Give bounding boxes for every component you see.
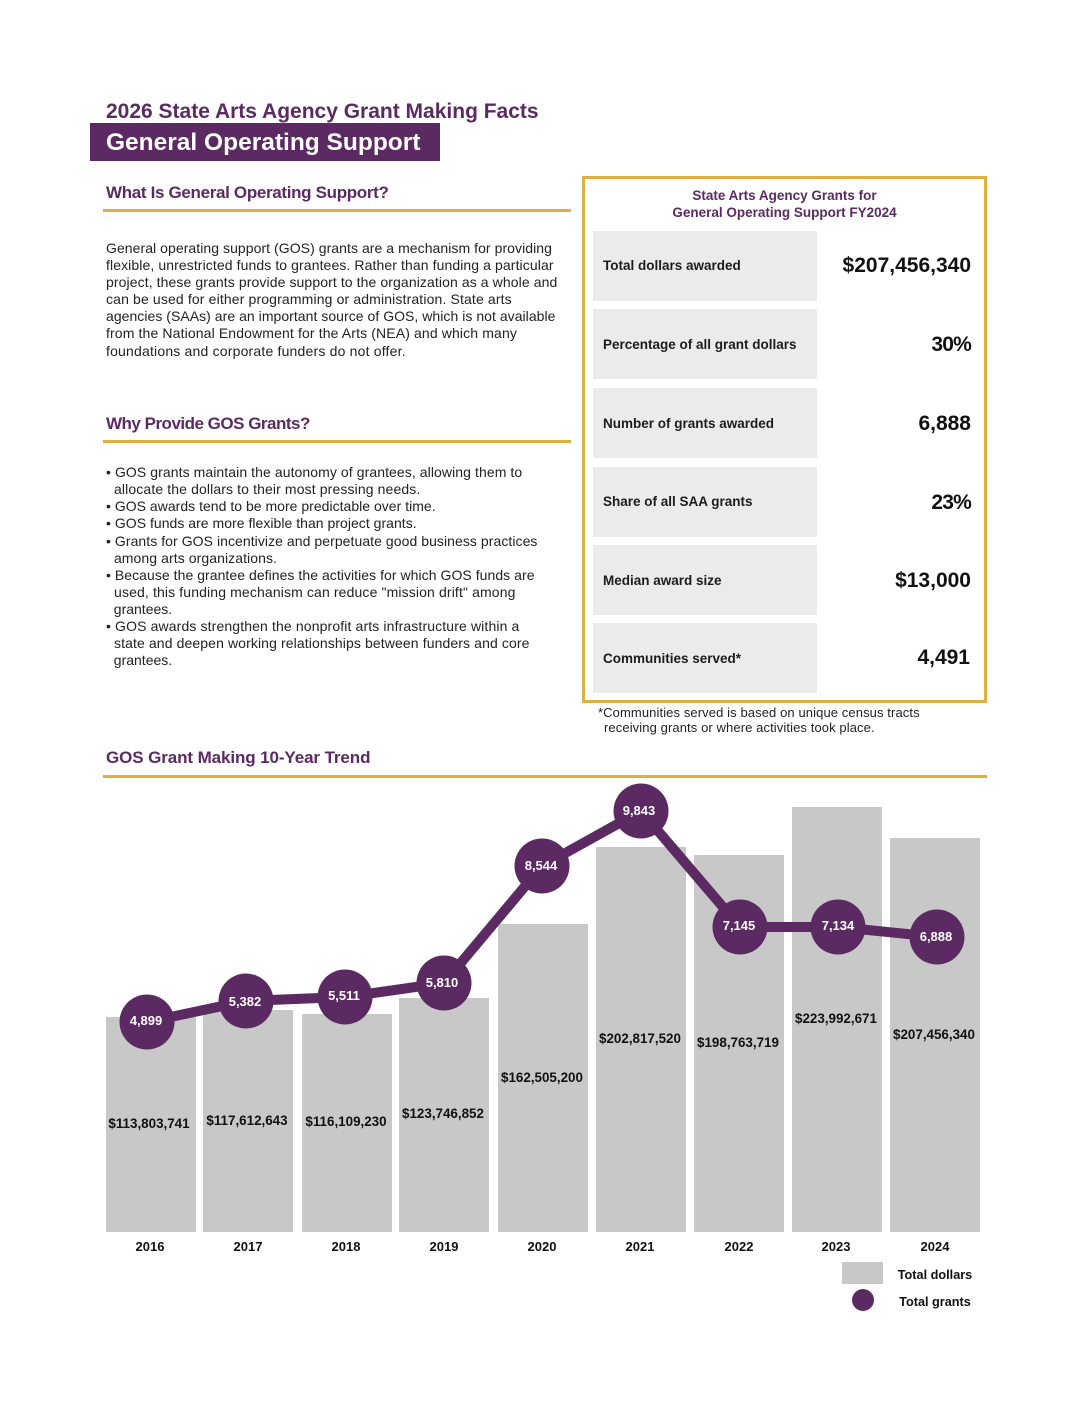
label: share of grants: Share of all SAA grants — [603, 494, 753, 509]
legend label: total dollars: Total dollars — [898, 1268, 972, 1282]
label: percentage: Percentage of all grant dollars — [603, 337, 797, 352]
label: percentage — [593, 309, 817, 379]
chart: GOS 10-year trend — [106, 784, 980, 1311]
text block: GOS description: from the National Endowment for the Arts (NEA) and which many — [106, 325, 517, 341]
label: total dollars: Total dollars awarded — [603, 258, 741, 273]
text block: GOS description: can be used for either programming or administration. State arts — [106, 291, 512, 307]
marker value labels: 5,382 — [229, 994, 261, 1009]
markers: total grants — [120, 784, 964, 1050]
label: number of grants — [593, 388, 817, 458]
bar value labels: $117,612,643 — [206, 1113, 288, 1128]
year axis labels: 2016 — [136, 1239, 164, 1254]
label: share of grants — [593, 467, 817, 537]
legend — [842, 1262, 972, 1311]
text block: reasons list: among arts organizations. — [114, 550, 277, 566]
bars: total dollars — [106, 807, 980, 1232]
label: median award — [593, 545, 817, 615]
footnote: communities served — [598, 705, 920, 735]
bar value labels: $162,505,200 — [501, 1070, 583, 1085]
heading: What Is General Operating Support: What Is General Operating Support? — [106, 183, 389, 202]
text block: reasons list: • GOS funds are more flexible than project grants. — [106, 515, 417, 531]
text block: reasons list: state and deepen working relationships between funders and core — [114, 635, 530, 651]
text block: GOS description: project, these grants provide support to the organization as a whole and — [106, 274, 557, 290]
value: share of grants: 23% — [931, 491, 971, 514]
bar value labels: $123,746,852 — [402, 1106, 484, 1121]
bar value labels: $202,817,520 — [599, 1031, 681, 1046]
text block: reasons list: used, this funding mechanism can reduce "mission drift" among — [114, 584, 516, 600]
footnote: communities served: *Communities served is based on unique census tracts — [598, 705, 920, 720]
year axis labels: 2021 — [626, 1239, 654, 1254]
heading: 10-year trend: GOS Grant Making 10-Year Trend — [106, 748, 370, 767]
year axis labels — [136, 1239, 950, 1254]
text block: reasons list: • Grants for GOS incentivize and perpetuate good business practices — [106, 532, 538, 548]
panel title — [672, 188, 897, 220]
banner: General Operating Support — [90, 123, 440, 161]
text block: GOS description: flexible, unrestricted funds to grantees. Rather than funding a particular — [106, 257, 554, 273]
bar value labels: $207,456,340 — [893, 1027, 975, 1042]
marker value labels: 5,810 — [426, 975, 458, 990]
bar value labels: $113,803,741 — [108, 1116, 190, 1131]
label: median award: Median award size — [603, 573, 722, 588]
marker value labels: 7,134 — [822, 918, 855, 933]
panel title: General Operating Support FY2024 — [672, 205, 897, 220]
marker value labels: 9,843 — [623, 803, 655, 818]
bar value labels: $223,992,671 — [795, 1011, 878, 1026]
text block: reasons list: grantees. — [114, 601, 172, 617]
year axis labels: 2022 — [725, 1239, 753, 1254]
text block: GOS description: General operating support (GOS) grants are a mechanism for providing — [106, 240, 552, 256]
marker value labels: 5,511 — [328, 988, 360, 1003]
year axis labels: 2019 — [430, 1239, 458, 1254]
bar value labels: $198,763,719 — [697, 1035, 779, 1050]
panel title: State Arts Agency Grants for — [692, 188, 877, 203]
year axis labels: 2020 — [528, 1239, 556, 1254]
text block: reasons list — [106, 464, 538, 668]
text block: reasons list: • Because the grantee defines the activities for which GOS funds are — [106, 567, 535, 583]
line: total grants — [147, 811, 937, 1022]
footnote: communities served: receiving grants or where activities took place. — [604, 720, 875, 735]
value: percentage: 30% — [931, 333, 971, 356]
marker value labels: 7,145 — [723, 918, 755, 933]
text block: reasons list: • GOS awards tend to be more predictable over time. — [106, 498, 436, 514]
legend swatch: total grants — [852, 1289, 874, 1311]
text block: reasons list: • GOS awards strengthen the nonprofit arts infrastructure within a — [106, 618, 519, 634]
year axis labels: 2017 — [234, 1239, 262, 1254]
marker value labels: 8,544 — [525, 858, 558, 873]
legend label: total grants: Total grants — [899, 1295, 971, 1309]
banner: General Operating Support: General Operating Support — [106, 129, 420, 156]
label: number of grants: Number of grants awarded — [603, 416, 774, 431]
label: communities served: Communities served* — [603, 651, 741, 666]
bar value labels — [108, 1011, 975, 1131]
year axis labels: 2023 — [822, 1239, 850, 1254]
text block: GOS description: foundations and corporate funders do not offer. — [106, 343, 406, 359]
text block: reasons list: grantees. — [114, 652, 172, 668]
label: communities served — [593, 623, 817, 693]
value: median award: $13,000 — [895, 569, 971, 592]
text block: reasons list: • GOS grants maintain the autonomy of grantees, allowing them to — [106, 464, 522, 480]
panel: FY2024 grant statistics — [582, 176, 987, 703]
bar value labels: $116,109,230 — [305, 1114, 387, 1129]
text block: reasons list: allocate the dollars to their most pressing needs. — [114, 481, 420, 497]
value: number of grants: 6,888 — [918, 412, 971, 435]
value: total dollars: $207,456,340 — [843, 254, 971, 277]
legend swatch: total dollars — [842, 1262, 883, 1284]
text block: GOS description — [106, 240, 557, 359]
heading: Why Provide GOS Grants: Why Provide GOS Grants? — [106, 414, 310, 433]
marker value labels — [130, 803, 952, 1028]
text block: GOS description: agencies (SAAs) are an important source of GOS, which is not available — [106, 308, 555, 324]
panel border — [582, 176, 987, 703]
marker value labels: 4,899 — [130, 1013, 162, 1028]
marker value labels: 6,888 — [920, 929, 952, 944]
label: total dollars — [593, 231, 817, 301]
value: communities served: 4,491 — [917, 646, 970, 669]
year axis labels: 2018 — [332, 1239, 360, 1254]
year axis labels: 2024 — [921, 1239, 950, 1254]
heading: report title: 2026 State Arts Agency Grant Making Facts — [106, 100, 539, 123]
